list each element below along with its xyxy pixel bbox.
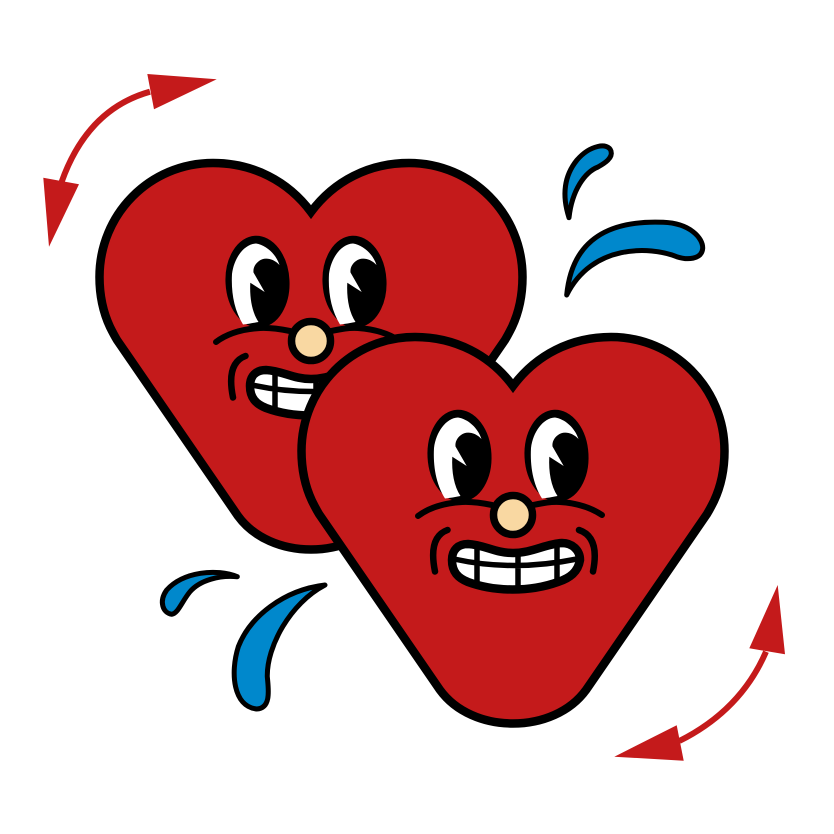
drop: large lower left: [234, 585, 325, 709]
drop: large upper right: [567, 222, 703, 295]
arrow: bottom-right double-headed rotation arrow: [614, 585, 785, 761]
drop: small lower left: [162, 572, 237, 614]
heart character: back: [100, 163, 522, 550]
heart character: front: [302, 337, 724, 724]
sweat drops: lower left: [162, 572, 325, 709]
drop: small upper right: [565, 146, 611, 218]
sweat drops: upper right: [565, 146, 703, 295]
arrow: top-left double-headed rotation arrow: [43, 74, 217, 247]
